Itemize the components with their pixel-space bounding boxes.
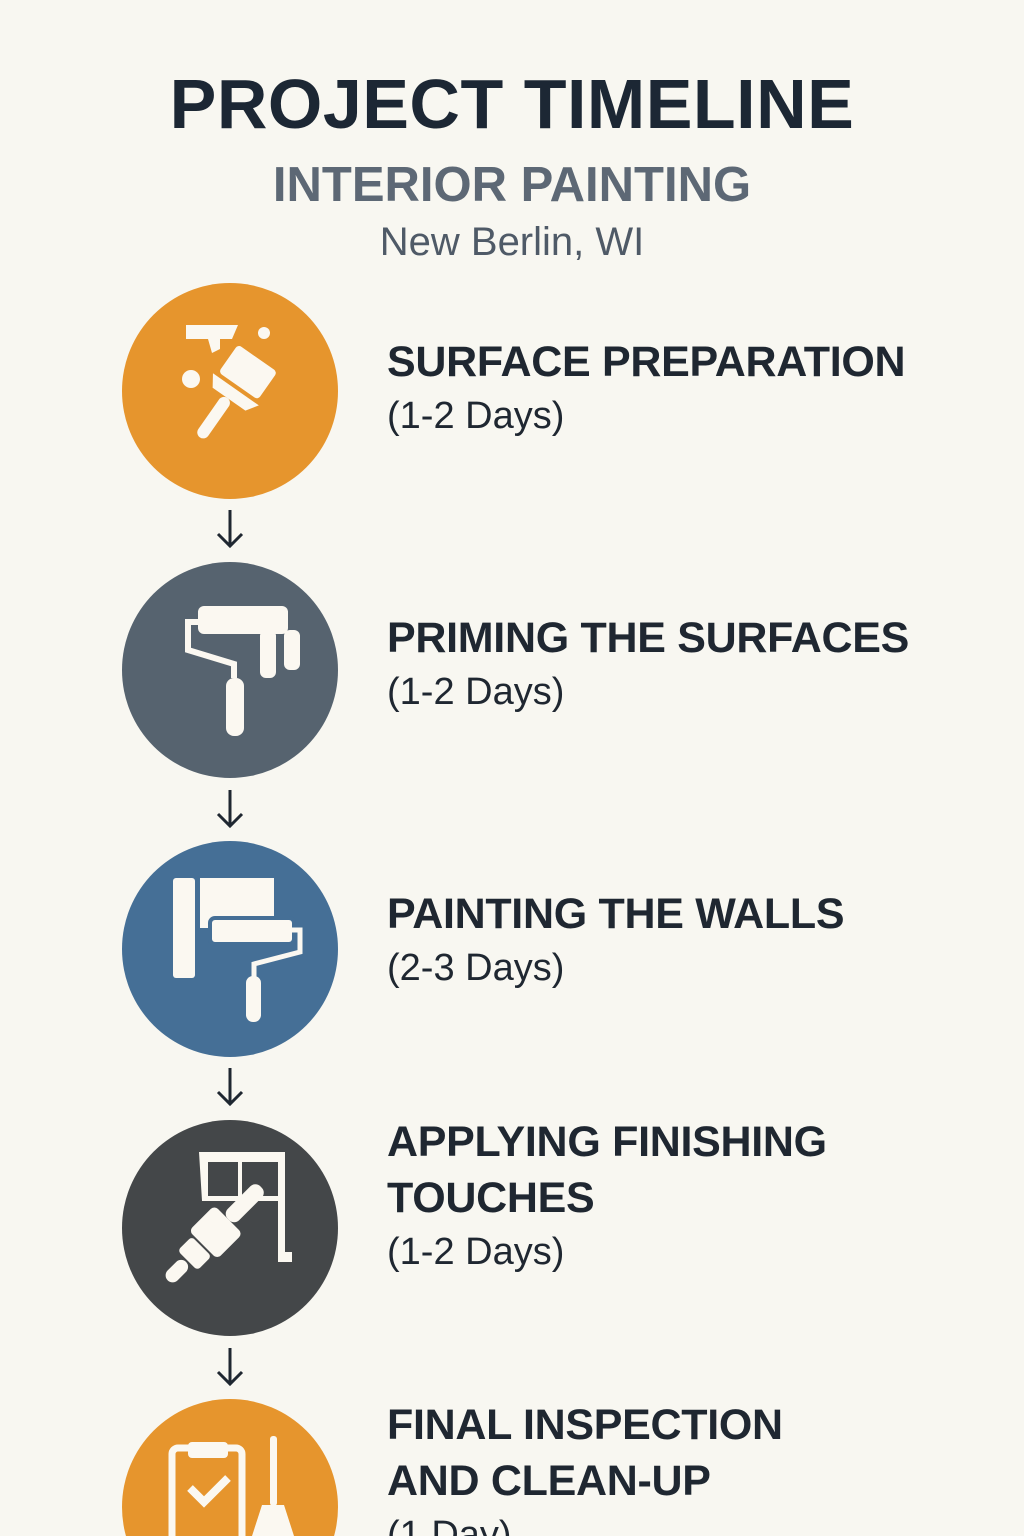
icon: step 3 roller and wall	[122, 841, 338, 1057]
step 2 text: PRIMING THE SURFACES	[387, 614, 909, 662]
step 3 text: PAINTING THE WALLS	[387, 890, 844, 938]
step 5 text	[387, 1401, 783, 1536]
step 1 text	[387, 338, 905, 437]
step 2 text: (1-2 Days)	[387, 671, 564, 713]
step 4 text: TOUCHES	[387, 1174, 594, 1222]
step 2 text	[387, 614, 909, 713]
step 4 text: (1-2 Days)	[387, 1231, 564, 1273]
step 3 text	[387, 890, 844, 989]
icon: step 5 clipboard and broom	[122, 1399, 338, 1536]
step 5 text: AND CLEAN-UP	[387, 1457, 711, 1505]
icon: step 1 scraper and roller	[122, 283, 338, 499]
step 1 text: SURFACE PREPARATION	[387, 338, 905, 386]
step 5 text: FINAL INSPECTION	[387, 1401, 783, 1449]
step 1 text: (1-2 Days)	[387, 395, 564, 437]
arrow 1	[218, 510, 242, 546]
arrow 3	[218, 1068, 242, 1104]
icon: step 4 brush and window	[122, 1120, 338, 1336]
arrow 4	[218, 1348, 242, 1384]
location: New Berlin, WI	[380, 220, 644, 264]
icon: step 2 roller	[122, 562, 338, 778]
step 4 text	[387, 1118, 827, 1273]
step 3 text: (2-3 Days)	[387, 947, 564, 989]
title: PROJECT TIMELINE	[170, 65, 854, 143]
subtitle: INTERIOR PAINTING	[273, 158, 751, 212]
step 4 text: APPLYING FINISHING	[387, 1118, 827, 1166]
arrow 2	[218, 790, 242, 826]
